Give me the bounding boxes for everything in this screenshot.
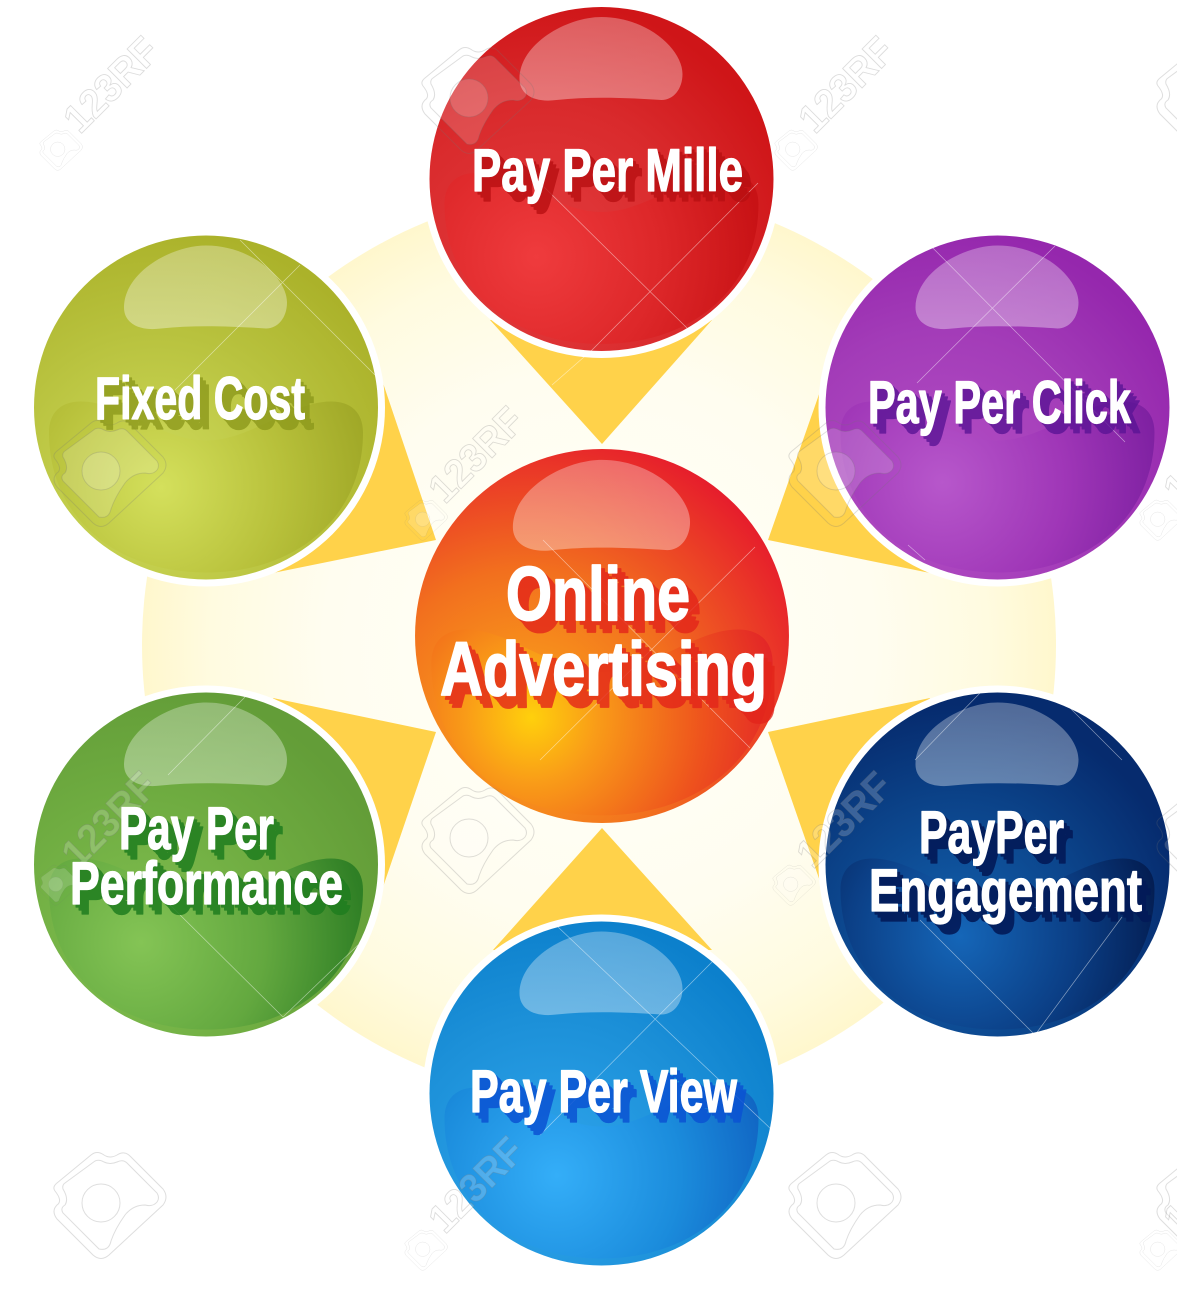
label: PayPer Engagement [869, 799, 1142, 924]
sphere: Pay Per Performance [27, 686, 385, 1044]
sphere: Fixed Cost [27, 228, 385, 586]
sphere: Online Advertising (centre) [415, 449, 789, 823]
triangle: lower right [768, 698, 930, 887]
background disk [142, 188, 1056, 1102]
triangle: top [490, 320, 712, 444]
connector triangles [273, 320, 930, 950]
watermark stamps: 123RF [420, 1129, 533, 1241]
triangle: bottom [493, 828, 712, 950]
sphere: PayPer Engagement [818, 686, 1176, 1044]
sphere: Pay Per Click [818, 228, 1176, 586]
gloss highlight [916, 246, 1078, 329]
gloss highlight [513, 460, 690, 551]
label: Online Advertising [440, 552, 767, 712]
label: Pay Per Performance [70, 795, 343, 917]
label: Online Advertising: Online [506, 552, 690, 637]
label: Online Advertising: Advertising [440, 627, 767, 712]
watermark stamps: 123RF [788, 764, 901, 876]
watermark stamps: 123RF [53, 764, 166, 876]
triangle: upper left [273, 383, 436, 573]
watermark stamps: 123RF [55, 29, 168, 141]
gloss highlight [520, 932, 682, 1015]
label: Pay Per View: Pay Per View [470, 1058, 737, 1125]
gloss highlight [916, 702, 1078, 786]
gloss highlight [124, 702, 287, 786]
label: PayPer Engagement: PayPer [919, 799, 1064, 866]
triangle: upper right [768, 383, 930, 573]
label: Pay Per Performance: Performance [70, 850, 343, 917]
sphere: Pay Per View [422, 914, 780, 1272]
watermark stamps: 123RF [420, 399, 533, 511]
label: Fixed Cost: Fixed Cost [95, 365, 305, 432]
label: Pay Per Performance: Pay Per [119, 795, 274, 862]
label: Pay Per Mille: Pay Per Mille [472, 137, 743, 204]
gloss highlight [520, 17, 682, 101]
watermark stamps: 123RF [790, 29, 903, 141]
triangle: lower left [273, 698, 436, 887]
sphere: Pay Per Mille [422, 0, 780, 358]
gloss highlight [124, 246, 287, 329]
